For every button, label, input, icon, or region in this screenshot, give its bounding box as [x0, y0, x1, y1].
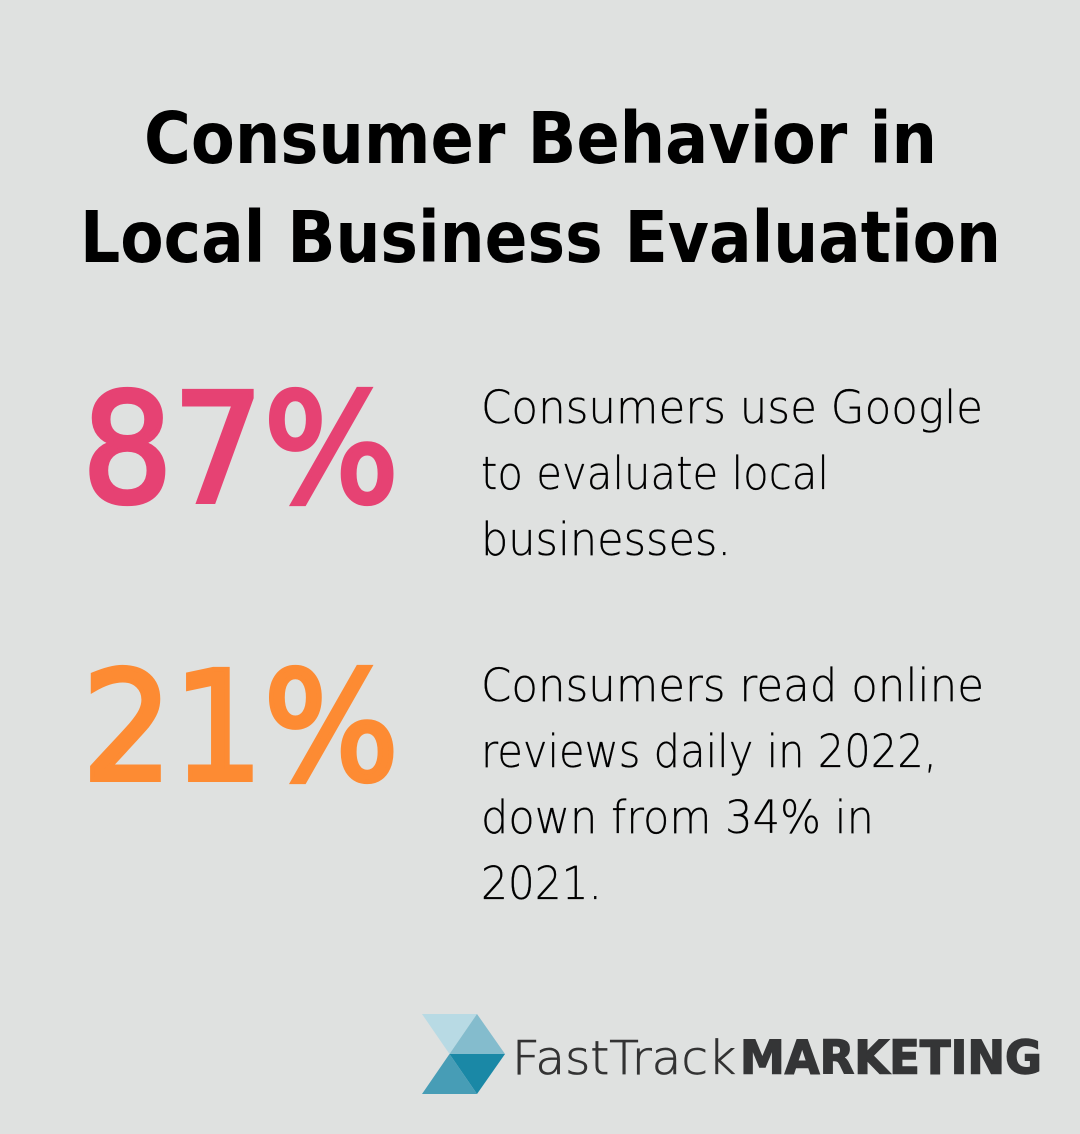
text: Google evaluation: businesses. — [481, 513, 731, 566]
stat: 21%: 21% — [82, 640, 399, 816]
icon: logo triangles — [422, 1014, 505, 1094]
text: online reviews: reviews daily in 2022, — [481, 725, 937, 778]
stat: 87%: 87% — [82, 362, 399, 538]
text: online reviews: 2021. — [481, 857, 602, 910]
logo: FastTrack Marketing — [422, 1014, 1042, 1094]
logo wordmark: FastTrack — [512, 1031, 736, 1085]
text: Google evaluation — [481, 381, 983, 566]
text: Google evaluation: Consumers use Google — [481, 381, 983, 434]
text: Google evaluation: to evaluate local — [481, 447, 829, 500]
logo wordmark: MARKETING — [740, 1030, 1042, 1084]
text: online reviews: Consumers read online — [481, 659, 984, 712]
text: online reviews: down from 34% in — [481, 791, 874, 844]
text: online reviews — [481, 659, 984, 910]
logo wordmark — [512, 1030, 1042, 1085]
title — [80, 97, 1001, 279]
title: Consumer Behavior in — [144, 97, 937, 180]
